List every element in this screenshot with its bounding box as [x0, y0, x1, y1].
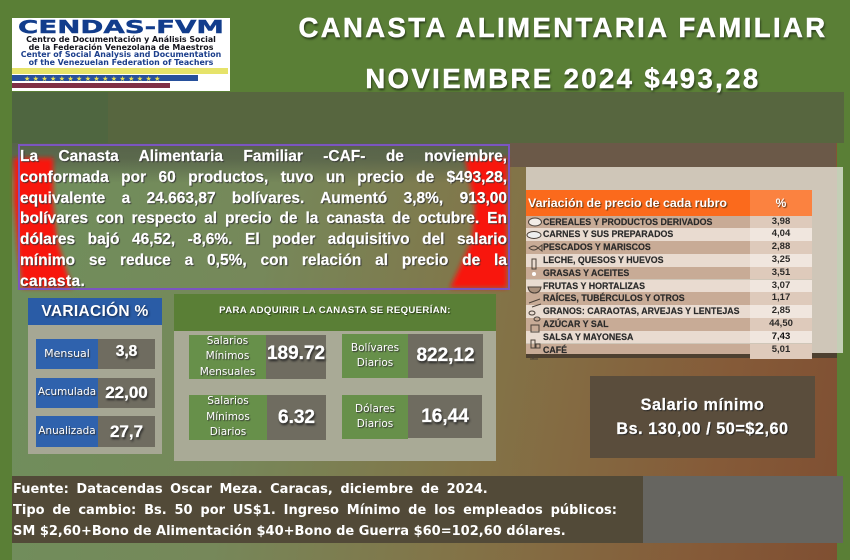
main text box: conformada por 60 productos, tuvo un precio de $493,28, [20, 169, 507, 186]
value: cafe: 5,01 [772, 344, 790, 354]
value: 16,44: 16,44 [421, 406, 469, 426]
title line 1: CANASTA ALIMENTARIA FAMILIAR [298, 12, 828, 43]
label: salarios minimos mensuales [189, 335, 266, 379]
main text box: bolívares con respecto al precio de la canasta de octubre. En [20, 210, 507, 227]
label: bolivares diarios: Bolívares [351, 342, 399, 354]
label: dolares diarios [342, 395, 408, 439]
label: salarios minimos diarios: Mínimos [206, 411, 250, 423]
required panel heading [174, 294, 496, 331]
row: carnes: CARNES Y SUS PREPARADOS [543, 229, 673, 239]
logo flag stripes [12, 68, 228, 88]
row: anualizada label [36, 416, 98, 447]
panel right edge over green [837, 167, 843, 353]
red blobs behind text [10, 154, 510, 292]
value: raices [750, 292, 812, 305]
table header: name: Variación de precio de cada rubro [528, 196, 727, 210]
variation heading [28, 298, 162, 325]
row: pescados: PESCADOS Y MARISCOS [543, 242, 651, 252]
top left darker patch [12, 92, 108, 143]
logo flag stripes: ★★★★★★★★★★★★★★★★ [24, 75, 163, 83]
panel: required to acquire the basket [174, 294, 496, 461]
table header: percent: % [776, 196, 786, 210]
background gradient panel [12, 142, 837, 560]
panel: price variation table [526, 167, 837, 353]
icons: food categories [526, 218, 542, 360]
row: anualizada label: Anualizada [38, 425, 96, 437]
value: 189.72: 189.72 [267, 343, 325, 364]
value: frutas: 3,07 [772, 280, 790, 290]
value: 822,12 [408, 334, 483, 378]
value: cereales: 3,98 [772, 216, 790, 226]
logo heading: CENDAS-FVM [18, 18, 224, 38]
value: salsa: 7,43 [772, 331, 790, 342]
label: salarios minimos diarios [189, 395, 267, 440]
row: grasas: GRASAS Y ACEITES [543, 268, 629, 278]
dark fade behind text top [12, 143, 510, 183]
value: cereales [750, 216, 812, 228]
value: frutas [750, 280, 812, 292]
value: granos [750, 305, 812, 318]
value: carnes [750, 228, 812, 241]
table header: name [526, 190, 750, 216]
logo subtitle: de la Federación Venezolana de Maestros [29, 43, 213, 52]
value: leche: 3,25 [772, 254, 790, 265]
row: cereales: CEREALES Y PRODUCTOS DERIVADOS [543, 216, 712, 226]
main text box [18, 144, 510, 290]
logo: CENDAS-FVM [12, 18, 230, 91]
panel: minimum wage: Salario mínimo [641, 396, 764, 414]
required panel body [174, 331, 496, 461]
main text box: dólares bajó 46,52, -8,6%. El poder adquisitivo del salario [20, 231, 507, 248]
value: 6.32 [267, 395, 326, 440]
row: acumulada value [98, 378, 155, 408]
row: mensual label [36, 339, 98, 369]
value: pescados: 2,88 [772, 241, 790, 252]
panel shadow strip [526, 353, 837, 358]
row: raices: RAÍCES, TUBÉRCULOS Y OTROS [543, 293, 685, 303]
row: salsa: SALSA Y MAYONESA [543, 332, 633, 342]
main text box: mínimo se reduce a 0,5%, con relación al precio de la [20, 252, 507, 269]
logo subtitle [21, 35, 221, 67]
footer text box: SM $2,60+Bono de Alimentación $40+Bono de Guerra $60=102,60 dólares. [13, 524, 566, 539]
value: raices: 1,17 [772, 292, 790, 303]
value: grasas: 3,51 [772, 267, 790, 278]
value: pescados [750, 241, 812, 254]
footer text box [12, 476, 643, 543]
value: 6.32: 6.32 [278, 406, 315, 428]
row: anualizada value: 27,7 [110, 422, 143, 440]
title line 2: NOVIEMBRE 2024 $493,28 [365, 63, 761, 94]
table header: percent [750, 190, 812, 216]
label: bolivares diarios: Diarios [357, 357, 393, 369]
row: mensual value [98, 339, 155, 369]
value: leche [750, 254, 812, 267]
row: acumulada value: 22,00 [105, 383, 148, 402]
label: dolares diarios: Diarios [357, 418, 393, 430]
value: grasas [750, 267, 812, 279]
required panel heading: PARA ADQUIRIR LA CANASTA SE REQUERÍAN: [219, 304, 451, 316]
logo subtitle: of the Venezuelan Federation of Teachers [29, 58, 213, 67]
value: 16,44 [408, 395, 482, 438]
label: salarios minimos diarios: Diarios [210, 426, 246, 438]
value: azucar: 44,50 [769, 318, 793, 329]
footer gray block [643, 476, 843, 543]
top right brown band [510, 143, 836, 167]
main text box: La Canasta Alimentaria Familiar -CAF- de noviembre, [20, 148, 507, 165]
footer text box: Tipo de cambio: Bs. 50 por US$1. Ingreso Mínimo de los empleados públicos: [13, 503, 617, 518]
panel: variation [28, 298, 162, 454]
value: salsa [750, 331, 812, 343]
logo subtitle: Centro de Documentación y Análisis Social [26, 35, 216, 44]
row: azucar: AZÚCAR Y SAL [543, 319, 609, 329]
row: frutas: FRUTAS Y HORTALIZAS [543, 280, 645, 290]
row: mensual value: 3,8 [116, 342, 137, 360]
value: 189.72 [266, 335, 326, 379]
variation panel body [28, 325, 162, 454]
logo subtitle: Center of Social Analysis and Documentation [21, 50, 221, 59]
panel: minimum wage [590, 376, 815, 458]
label: dolares diarios: Dólares [355, 402, 395, 414]
footer text box: Fuente: Datacendas Oscar Meza. Caracas, diciembre de 2024. [13, 482, 488, 497]
row: mensual label: Mensual [44, 347, 90, 360]
variation heading: VARIACIÓN % [41, 302, 149, 320]
row: granos: GRANOS: CARAOTAS, ARVEJAS Y LENTEJAS [543, 306, 740, 316]
label: salarios minimos diarios: Salarios [207, 395, 249, 407]
row: acumulada label: Acumulada [38, 386, 96, 398]
label: bolivares diarios [342, 334, 408, 378]
main text box: equivalente a 24.663,87 bolívares. Aumentó 3,8%, 913,00 [20, 190, 507, 207]
value: azucar [750, 318, 812, 331]
panel: minimum wage: Bs. 130,00 / 50=$2,60 [616, 420, 789, 438]
main text box: canasta. [20, 273, 85, 290]
row: anualizada value [98, 416, 155, 447]
label: salarios minimos mensuales: Mensuales [200, 366, 255, 378]
label: salarios minimos mensuales: Mínimos [206, 350, 249, 362]
label: salarios minimos mensuales: Salarios [207, 335, 248, 347]
row: acumulada label [36, 378, 98, 408]
value: carnes: 4,04 [772, 228, 790, 239]
row: leche: LECHE, QUESOS Y HUEVOS [543, 255, 664, 265]
value: cafe [750, 344, 812, 359]
top dark band [12, 92, 844, 143]
row: cafe: CAFÉ [543, 344, 567, 354]
table rows [526, 190, 812, 360]
value: 822,12: 822,12 [416, 345, 475, 366]
value: granos: 2,85 [772, 305, 790, 316]
